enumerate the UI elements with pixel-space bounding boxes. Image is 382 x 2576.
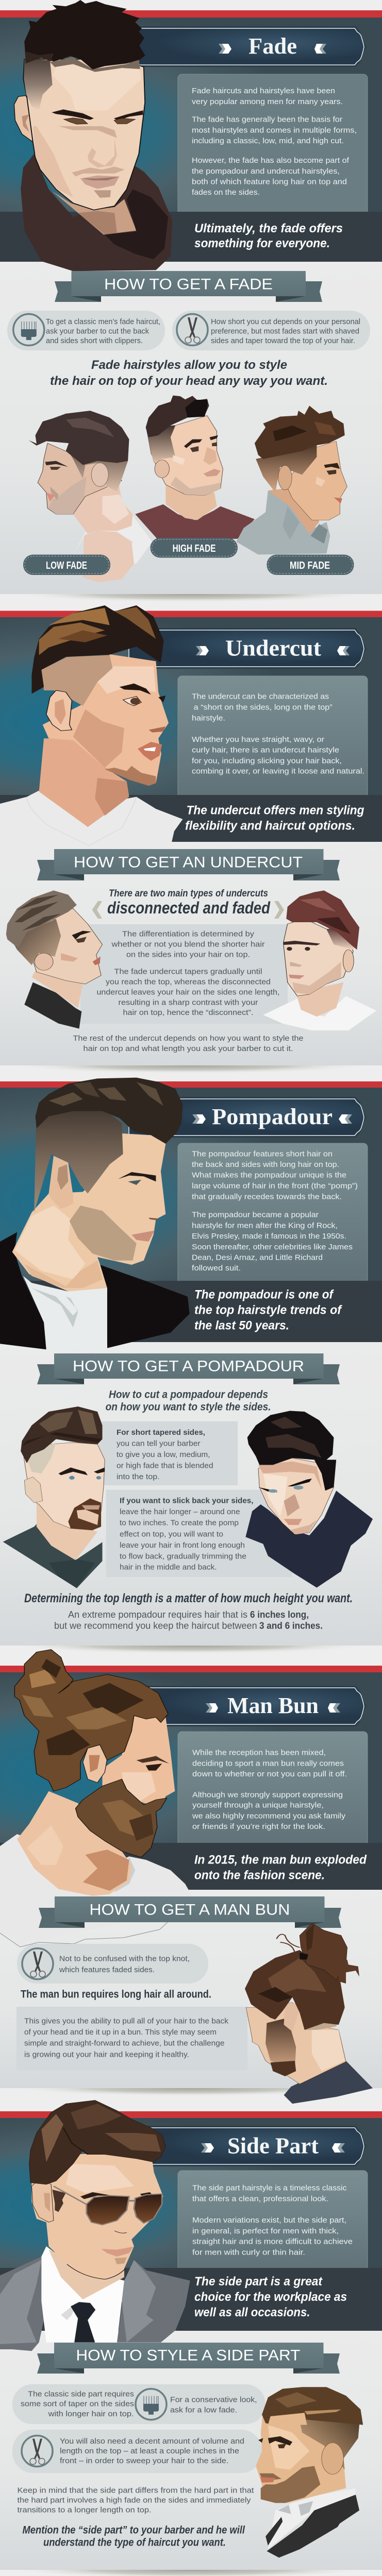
pill: top knot note	[17, 1944, 208, 1984]
text box: side part intro: straight hair and is more difficult to achieve	[192, 2238, 353, 2246]
icon: scissors	[22, 1948, 53, 1979]
heading: fade hairstyles: the hair on top of your head any way you want.	[50, 374, 328, 388]
text box: man bun intro: down to whether or not you can pull it off.	[192, 1770, 347, 1778]
banner: how to get a fade: HOW TO GET A FADE	[104, 276, 273, 293]
text: recommended pompadour length: 6 inches long,	[250, 1609, 309, 1620]
ribbon: side part title	[129, 2126, 367, 2166]
ribbon: fade title	[129, 26, 367, 67]
callout band: pompadour: The pompadour is one of	[194, 1288, 334, 1302]
banner: how to get an undercut	[37, 849, 340, 880]
text box: man bun intro: While the reception has been mixed,	[192, 1749, 326, 1757]
text: undercut explanation	[73, 930, 303, 1053]
banner: how to get a pompadour: HOW TO GET A POMPADOUR	[73, 1358, 304, 1375]
portrait: side part fade hair	[262, 2387, 363, 2425]
text box: undercut intro: a “short on the sides, long on the top”	[194, 703, 333, 711]
text box: short tapered sides: you can tell your barber	[117, 1439, 201, 1448]
text box: pompadour intro: followed suit.	[192, 1264, 241, 1273]
callout band: man bun: In 2015, the man bun exploded	[194, 1853, 367, 1867]
portrait: mid fade	[236, 406, 347, 554]
text box: undercut intro: The undercut can be characterized as	[192, 693, 329, 701]
text box: pompadour intro: hairstyle for men after the King of Rock,	[192, 1222, 338, 1230]
title: Side Part: Side Part	[227, 2133, 319, 2158]
callout band: undercut: The undercut offers men styling	[187, 804, 364, 818]
text box: undercut intro: curly hair, there is an undercut hairstyle	[192, 747, 339, 755]
text box: pompadour intro: Soon thereafter, other celebrities like James	[192, 1243, 353, 1251]
icon: clipper	[13, 314, 44, 345]
text box: slick back sides: effect on top, you will want to	[120, 1530, 223, 1538]
callout band: side part	[0, 2268, 382, 2331]
text: undercut explanation: The differentiation is determined by	[122, 930, 255, 939]
panel: side part section	[0, 2100, 382, 2570]
text: undercut explanation: The fade undercut tapers gradually until	[114, 968, 262, 976]
callout band: undercut: flexibility and haircut options.	[185, 819, 355, 833]
text: undercut explanation: resulting in a sharp contrast with your	[119, 998, 258, 1007]
text box: short tapered sides: For short tapered sides,	[117, 1428, 205, 1437]
chevrons: undercut title	[196, 646, 350, 655]
heading: how to cut a pompadour: How to cut a pompadour depends	[109, 1388, 268, 1400]
icon: scissors	[22, 2436, 53, 2467]
pill: scissors tip: sides and taper toward the top of your hair.	[211, 336, 355, 345]
text box: fade intro: both of which feature long hair on top and	[192, 178, 347, 187]
text box: pompadour intro: that gradually recedes towards the back.	[192, 1193, 342, 1201]
icon: scissors	[177, 314, 208, 345]
pill: volume note	[12, 2430, 262, 2473]
text box: slick back sides: hair in the middle and back.	[120, 1563, 217, 1572]
text: undercut explanation: The rest of the undercut depends on how you want to style the	[73, 1034, 303, 1043]
banner: how to get an undercut: HOW TO GET AN UNDERCUT	[74, 854, 303, 871]
text box: pompadour intro: Elvis Presley, made it famous in the 1950s.	[192, 1232, 346, 1241]
text: undercut explanation: on the sides into your hair on top.	[126, 951, 250, 959]
label: mid fade: MID FADE	[290, 560, 330, 571]
text box: side part intro: The side part hairstyle is a timeless classic	[192, 2184, 346, 2193]
heading: fade hairstyles: Fade hairstyles allow you to style	[91, 358, 287, 372]
portrait: faded undercut	[263, 890, 376, 1030]
pill: taper note	[12, 2384, 265, 2424]
heading: two types of undercut	[92, 888, 284, 919]
text box: fade intro	[178, 74, 368, 224]
text: undercut explanation: you reach the top, whereas the disconnected	[106, 978, 271, 987]
banner: how to style a side part	[37, 2343, 340, 2374]
text: recommended pompadour length	[54, 1609, 323, 1631]
pill: scissors tip: preference, but most fades start with shaved	[211, 327, 359, 336]
pill: clipper tip: and sides short with clippers.	[46, 336, 143, 345]
text box: short tapered sides: to give you a low, medium,	[117, 1450, 210, 1459]
text box: man bun how-to: of your head and tie it up in a bun. This style may seem	[24, 2028, 217, 2037]
portrait: elvis style	[245, 1411, 373, 1588]
text: recommended pompadour length: but we recommend you keep the haircut between	[54, 1621, 257, 1631]
shirt hem line: man bun	[0, 1922, 168, 1947]
title: Man Bun: Man Bun	[227, 1693, 319, 1718]
chevrons: side part title	[201, 2143, 345, 2153]
pill: clipper tip: ask your barber to cut the back	[46, 327, 149, 336]
heading: man bun requires long hair: The man bun requires long hair all around.	[21, 1989, 211, 2001]
text box: short tapered sides: into the top.	[117, 1472, 160, 1481]
banner: how to get a man bun	[39, 1896, 341, 1928]
pill: volume note: front – in order to sweep your hair to the side.	[60, 2456, 229, 2465]
pill: taper note: with longer hair on top.	[48, 2410, 134, 2418]
callout band: pompadour: the last 50 years.	[194, 1319, 289, 1333]
portrait: goatee pompadour	[3, 1406, 105, 1588]
text box: short tapered sides	[98, 1421, 238, 1485]
text: recommended pompadour length: An extreme pompadour requires hair that is	[68, 1609, 247, 1620]
title: Undercut: Undercut	[225, 636, 321, 660]
text: recommended pompadour length: 3 and 6 inches.	[259, 1621, 323, 1631]
text box: side part intro: that offers a clean, professional look.	[192, 2195, 328, 2204]
text box: side part intro: for men with curly or thin hair.	[192, 2249, 305, 2257]
text box: short tapered sides: or high fade that is blended	[117, 1462, 213, 1470]
portrait: undercut man	[0, 605, 182, 849]
pill: clipper tip: To get a classic men’s fade haircut,	[46, 317, 160, 326]
text box: man bun intro: deciding to sport a man bun really comes	[192, 1759, 344, 1768]
text box: pompadour intro: Dean, Desi Arnaz, and Little Richard	[192, 1254, 323, 1262]
portrait: fade man	[14, 0, 173, 271]
text box: undercut intro: hairstyle.	[192, 714, 225, 722]
text box: undercut intro	[178, 676, 368, 805]
portrait: low fade	[29, 411, 152, 582]
text box: man bun how-to	[16, 2007, 247, 2071]
chevrons: fade title	[219, 44, 326, 54]
text: hard part note: Keep in mind that the side part differs from the hard part in that	[18, 2486, 254, 2495]
pill: clipper tip	[7, 311, 165, 350]
portrait: side part fade bearded man	[256, 2410, 360, 2557]
text box: slick back sides: to two inches. To create the pomp	[120, 1519, 239, 1528]
pill: taper note: For a conservative look,	[170, 2396, 257, 2404]
pill: top knot note: which features faded sides.	[59, 1965, 155, 1974]
text box: slick back sides: to flow back, gradually trimming the	[120, 1552, 246, 1561]
heading: two types of undercut: There are two main types of undercuts	[109, 888, 268, 899]
callout band: pompadour	[0, 1281, 382, 1342]
ribbon: pompadour title	[129, 1097, 367, 1138]
text box: man bun how-to: This gives you the ability to pull all of your hair to the back	[24, 2016, 229, 2025]
panel: fade section	[0, 0, 382, 594]
banner: how to get a fade	[55, 271, 322, 302]
label: low fade: LOW FADE	[46, 560, 87, 571]
text box: man bun intro: we also highly recommend you ask family	[192, 1812, 346, 1820]
text box: man bun intro: Although we strongly support expressing	[192, 1791, 343, 1799]
callout band: side part: choice for the workplace as	[194, 2290, 347, 2304]
text box: man bun how-to: simple and straight-forward to achieve, but the challenge	[24, 2039, 225, 2048]
text box: slick back sides: If you want to slick back your sides,	[120, 1496, 254, 1505]
text box: fade intro: the pompadour and undercut hairstyles,	[192, 167, 340, 176]
text box: side part intro: Modern variations exist, but the side part,	[192, 2216, 346, 2225]
text: undercut explanation: hair on top and what length you ask your barber to cut it.	[84, 1044, 293, 1053]
text box: man bun intro: yourself through a unique hairstyle,	[192, 1802, 324, 1810]
banner: how to get a pompadour	[37, 1353, 340, 1384]
text: hard part note: the hard part involves a high fade on the sides and immediately	[18, 2496, 251, 2505]
pill: volume note: You will also need a decent amount of volume and	[60, 2437, 244, 2446]
chevrons: pompadour title	[192, 1114, 352, 1124]
pill: top knot note: Not to be confused with the top knot,	[59, 1955, 190, 1963]
text box: slick back sides: leave your hair in front long enough	[120, 1541, 245, 1550]
text box: pompadour intro	[178, 1143, 368, 1293]
text box: fade intro: However, the fade has also become part of	[192, 157, 350, 165]
text box: slick back sides: leave the hair longer – around one	[120, 1507, 240, 1516]
text: hard part note	[18, 2486, 254, 2515]
callout band: fade: Ultimately, the fade offers	[194, 222, 343, 235]
callout band: fade: something for everyone.	[194, 236, 330, 250]
text box: undercut intro: for you, including slicking your hair back,	[192, 757, 342, 765]
pill: scissors tip	[172, 311, 370, 350]
text box: fade intro: Fade haircuts and hairstyles have been	[192, 87, 335, 95]
heading: two types of undercut: disconnected and faded	[107, 899, 271, 917]
text box: fade intro: very popular among men for many years.	[192, 98, 343, 106]
heading: how to cut a pompadour: on how you want to style the sides.	[106, 1401, 271, 1413]
banner: how to get a man bun: HOW TO GET A MAN BUN	[89, 1902, 290, 1919]
text: undercut explanation: hair on top, hence the “disconnect”.	[123, 1008, 254, 1017]
pill: taper note: The classic side part requires	[28, 2390, 134, 2399]
label: high fade	[151, 538, 238, 557]
heading: mention the side part: Mention the “side part” to your barber and he will	[23, 2524, 245, 2536]
callout band: fade	[0, 212, 382, 262]
callout band: pompadour: the top hairstyle trends of	[194, 1303, 342, 1317]
panel: undercut section	[0, 605, 382, 1065]
text box: fade intro: fades on the sides.	[192, 189, 260, 197]
text box: pompadour intro: What makes the pompadour unique is the	[192, 1172, 346, 1180]
text box: fade intro: most hairstyles and comes in multiple forms,	[192, 127, 357, 135]
portrait: pompadour hair	[36, 1078, 182, 1144]
heading: mention the side part	[23, 2524, 245, 2549]
pill: volume note: length on the top – at least a couple inches in the	[60, 2447, 239, 2455]
panel: man bun section	[0, 1650, 382, 2104]
gray box: undercut explanation	[80, 924, 288, 1024]
ribbon: undercut title	[129, 628, 367, 669]
text box: man bun intro	[178, 1732, 368, 1855]
pill: scissors tip: How short you cut depends on your personal	[211, 317, 360, 326]
text: hard part note: transitions to a longer length on top.	[18, 2506, 152, 2515]
title: Fade: Fade	[248, 33, 297, 59]
text box: undercut intro: combing it over, or leaving it loose and natural.	[192, 768, 364, 776]
ribbon: man bun title	[129, 1686, 367, 1726]
portrait: high fade	[135, 396, 255, 539]
icon: clipper	[136, 2389, 167, 2420]
text box: fade intro: The fade has generally been the basis for	[192, 115, 342, 124]
callout band: undercut	[0, 795, 382, 842]
portrait: man bun profile	[0, 1650, 192, 1944]
chevrons: man bun title	[206, 1703, 340, 1713]
heading: mention the side part: understand the type of haircut you want.	[43, 2537, 226, 2549]
text box: fade intro: including a classic, low, mid, and high cut.	[192, 137, 344, 145]
section shadows	[13, 586, 369, 2576]
heading: fade hairstyles	[50, 358, 328, 388]
callout band: man bun	[0, 1843, 382, 1890]
callout band: side part: well as all occasions.	[194, 2306, 310, 2319]
title: Pompadour: Pompadour	[212, 1104, 333, 1129]
portrait: man bun back view	[245, 1923, 373, 2104]
text box: pompadour intro: The pompadour became a popular	[192, 1211, 319, 1219]
label: mid fade	[267, 554, 354, 575]
text box: side part intro: in general, is perfect for men with thick,	[192, 2227, 339, 2235]
heading: how to cut a pompadour	[106, 1388, 271, 1413]
text box: pompadour intro: The pompadour features short hair on	[192, 1150, 333, 1158]
text: undercut explanation: undercut leaves your hair on the sides one length,	[97, 988, 279, 997]
banner: how to style a side part: HOW TO STYLE A SIDE PART	[76, 2347, 300, 2364]
portrait: pompadour man	[0, 1104, 190, 1352]
text box: undercut intro: Whether you have straight, wavy, or	[192, 736, 324, 744]
panel: pompadour section	[0, 1078, 382, 1646]
text box: slick back sides	[106, 1490, 292, 1577]
text: undercut explanation: whether or not you blend the shorter hair	[111, 940, 265, 949]
text box: man bun how-to: is growing out your hair and keeping it healthy.	[24, 2050, 189, 2059]
portrait: side part hair	[29, 2100, 165, 2184]
text box: pompadour intro: large volume of hair in the front (the “pomp”)	[192, 1182, 358, 1191]
label: high fade: HIGH FADE	[173, 543, 216, 554]
pill: taper note: some sort of taper on the sides	[21, 2400, 134, 2409]
label: low fade	[23, 554, 110, 575]
text box: man bun intro: or friends if you’re right for the look.	[192, 1823, 325, 1831]
portrait: disconnected undercut	[6, 890, 102, 1029]
text box: pompadour intro: the back and sides with long hair on top.	[192, 1161, 339, 1169]
callout band: side part: The side part is a great	[194, 2275, 323, 2289]
callout band: man bun: onto the fashion scene.	[194, 1868, 325, 1882]
pill: taper note: ask for a low fade.	[170, 2405, 237, 2414]
portrait: side part man	[0, 2152, 190, 2351]
text box: side part intro	[178, 2171, 368, 2279]
